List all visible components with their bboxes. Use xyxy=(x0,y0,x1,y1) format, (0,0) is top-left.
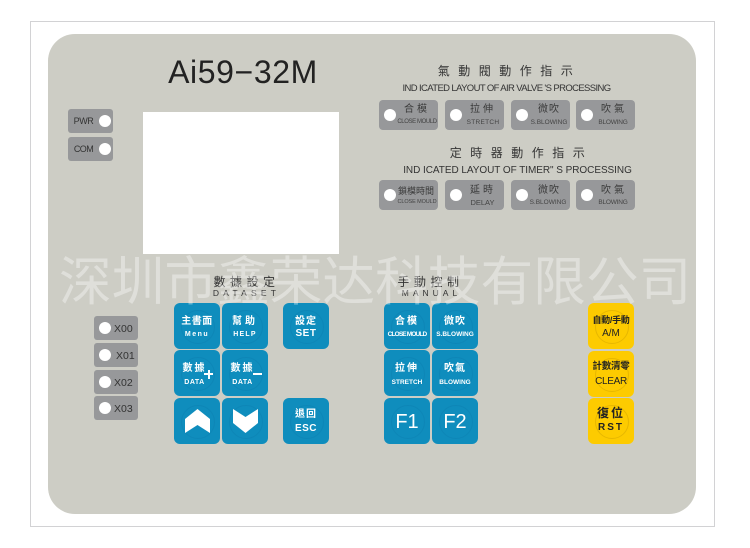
button: stretch xyxy=(384,350,430,396)
heading: data set: 數據設定 xyxy=(213,275,280,289)
button: F2: F2 xyxy=(443,411,467,433)
button: esc xyxy=(283,398,329,444)
button: up arrow xyxy=(174,398,220,444)
button: data minus: 數據 xyxy=(230,363,254,374)
button: auto/manual xyxy=(588,303,634,349)
indicator: blowing xyxy=(576,100,635,130)
indicator: s.blowing timer xyxy=(511,180,570,210)
indicator: blowing: BLOWING xyxy=(598,119,628,126)
indicator: X00: X00 xyxy=(114,323,133,335)
button: data plus: DATA xyxy=(184,379,205,386)
button: help: HELP xyxy=(233,331,257,338)
indicator: close mould: 合模 xyxy=(404,104,430,115)
button: menu: 主書面 xyxy=(181,316,213,327)
button: stretch: 拉伸 xyxy=(395,363,419,374)
indicator: X00 xyxy=(94,316,138,340)
indicator: blowing timer xyxy=(576,180,635,210)
subheading: manual: MANUAL xyxy=(402,288,461,298)
heading: timer indicators: 定時器動作指示 xyxy=(450,146,593,160)
button: blowing: 吹氣 xyxy=(444,363,466,374)
indicator: X02 xyxy=(94,370,138,394)
indicator: delay xyxy=(445,180,504,210)
indicator: mould lock time: CLOSE MOULD xyxy=(398,199,436,205)
button: clear: CLEAR xyxy=(595,376,627,387)
button: menu xyxy=(174,303,220,349)
indicator: X02: X02 xyxy=(114,377,133,389)
button: auto/manual: 自動/手動 xyxy=(592,315,630,325)
button: clear: 計數清零 xyxy=(592,361,630,372)
indicator: s.blowing xyxy=(511,100,570,130)
button: auto/manual: A/M xyxy=(602,328,620,339)
indicator: s.blowing timer: S.BLOWING xyxy=(530,199,566,206)
button: close mould xyxy=(384,303,430,349)
button: s.blowing: 微吹 xyxy=(444,316,466,327)
button: stretch: STRETCH xyxy=(392,379,422,386)
subheading: air valve indicators: IND ICATED LAYOUT OF AIR VALVE 'S PROCESSING xyxy=(402,83,611,94)
indicator: s.blowing timer: 微吹 xyxy=(538,185,560,196)
button: clear xyxy=(588,351,634,397)
button: down arrow xyxy=(222,398,268,444)
indicator: delay: DELAY xyxy=(470,198,495,207)
panel: control panel faceplate xyxy=(48,34,696,514)
button: help xyxy=(222,303,268,349)
indicator: blowing timer: 吹氣 xyxy=(601,185,627,196)
button: close mould: 合模 xyxy=(395,316,419,327)
button: data plus xyxy=(174,350,220,396)
button: set xyxy=(283,303,329,349)
button: s.blowing xyxy=(432,303,478,349)
indicator: close mould: CLOSE MOULD xyxy=(397,119,437,125)
indicator: X01 xyxy=(94,343,138,367)
button: set: 設定 xyxy=(295,316,317,327)
button: reset: RST xyxy=(598,422,624,433)
subheading: timer indicators: IND ICATED LAYOUT OF TIMER" S PROCESSING xyxy=(403,165,632,176)
indicator: stretch: STRETCH xyxy=(467,119,499,126)
indicator: PWR: PWR xyxy=(74,116,93,126)
indicator: mould lock time xyxy=(379,180,438,210)
indicator: COM xyxy=(68,137,113,161)
button: F2 xyxy=(432,398,478,444)
button: close mould: CLOSE MOULD xyxy=(388,331,426,338)
button: reset xyxy=(588,398,634,444)
indicator: delay: 延時 xyxy=(470,185,496,196)
button: data plus: 數據 xyxy=(182,363,206,374)
button: blowing xyxy=(432,350,478,396)
indicator: X03 xyxy=(94,396,138,420)
title: Ai59−32M xyxy=(168,54,318,90)
LCD screen xyxy=(143,112,339,254)
indicator: blowing timer: BLOWING xyxy=(598,199,628,206)
indicator: COM: COM xyxy=(74,144,93,154)
indicator: close mould xyxy=(379,100,438,130)
indicator: s.blowing: S.BLOWING xyxy=(531,119,567,126)
button: blowing: BLOWING xyxy=(439,379,471,386)
button: esc: ESC xyxy=(295,423,317,434)
button: F1 xyxy=(384,398,430,444)
button: menu: Menu xyxy=(185,331,209,338)
heading: air valve indicators: 氣動閥動作指示 xyxy=(438,64,581,78)
button: esc: 退回 xyxy=(295,409,317,420)
heading: manual: 手動控制 xyxy=(397,275,464,289)
watermark: 深圳市鑫荣达科技有限公司 xyxy=(59,253,691,312)
button: s.blowing: S.BLOWING xyxy=(436,331,474,338)
indicator: mould lock time: 鎖模時間 xyxy=(398,186,434,196)
indicator: PWR xyxy=(68,109,113,133)
indicator: blowing: 吹氣 xyxy=(601,104,627,115)
button: set: SET xyxy=(296,328,316,339)
indicator: X01: X01 xyxy=(116,350,135,362)
indicator: stretch xyxy=(445,100,504,130)
indicator: s.blowing: 微吹 xyxy=(538,104,560,115)
indicator: stretch: 拉伸 xyxy=(470,104,496,115)
indicator: X03: X03 xyxy=(114,403,133,415)
button: help: 幫助 xyxy=(232,316,258,327)
button: reset: 復位 xyxy=(597,406,625,420)
subheading: data set: DATASET xyxy=(213,288,280,298)
button: data minus xyxy=(222,350,268,396)
button: F1: F1 xyxy=(395,411,419,433)
button: data minus: DATA xyxy=(232,379,253,386)
